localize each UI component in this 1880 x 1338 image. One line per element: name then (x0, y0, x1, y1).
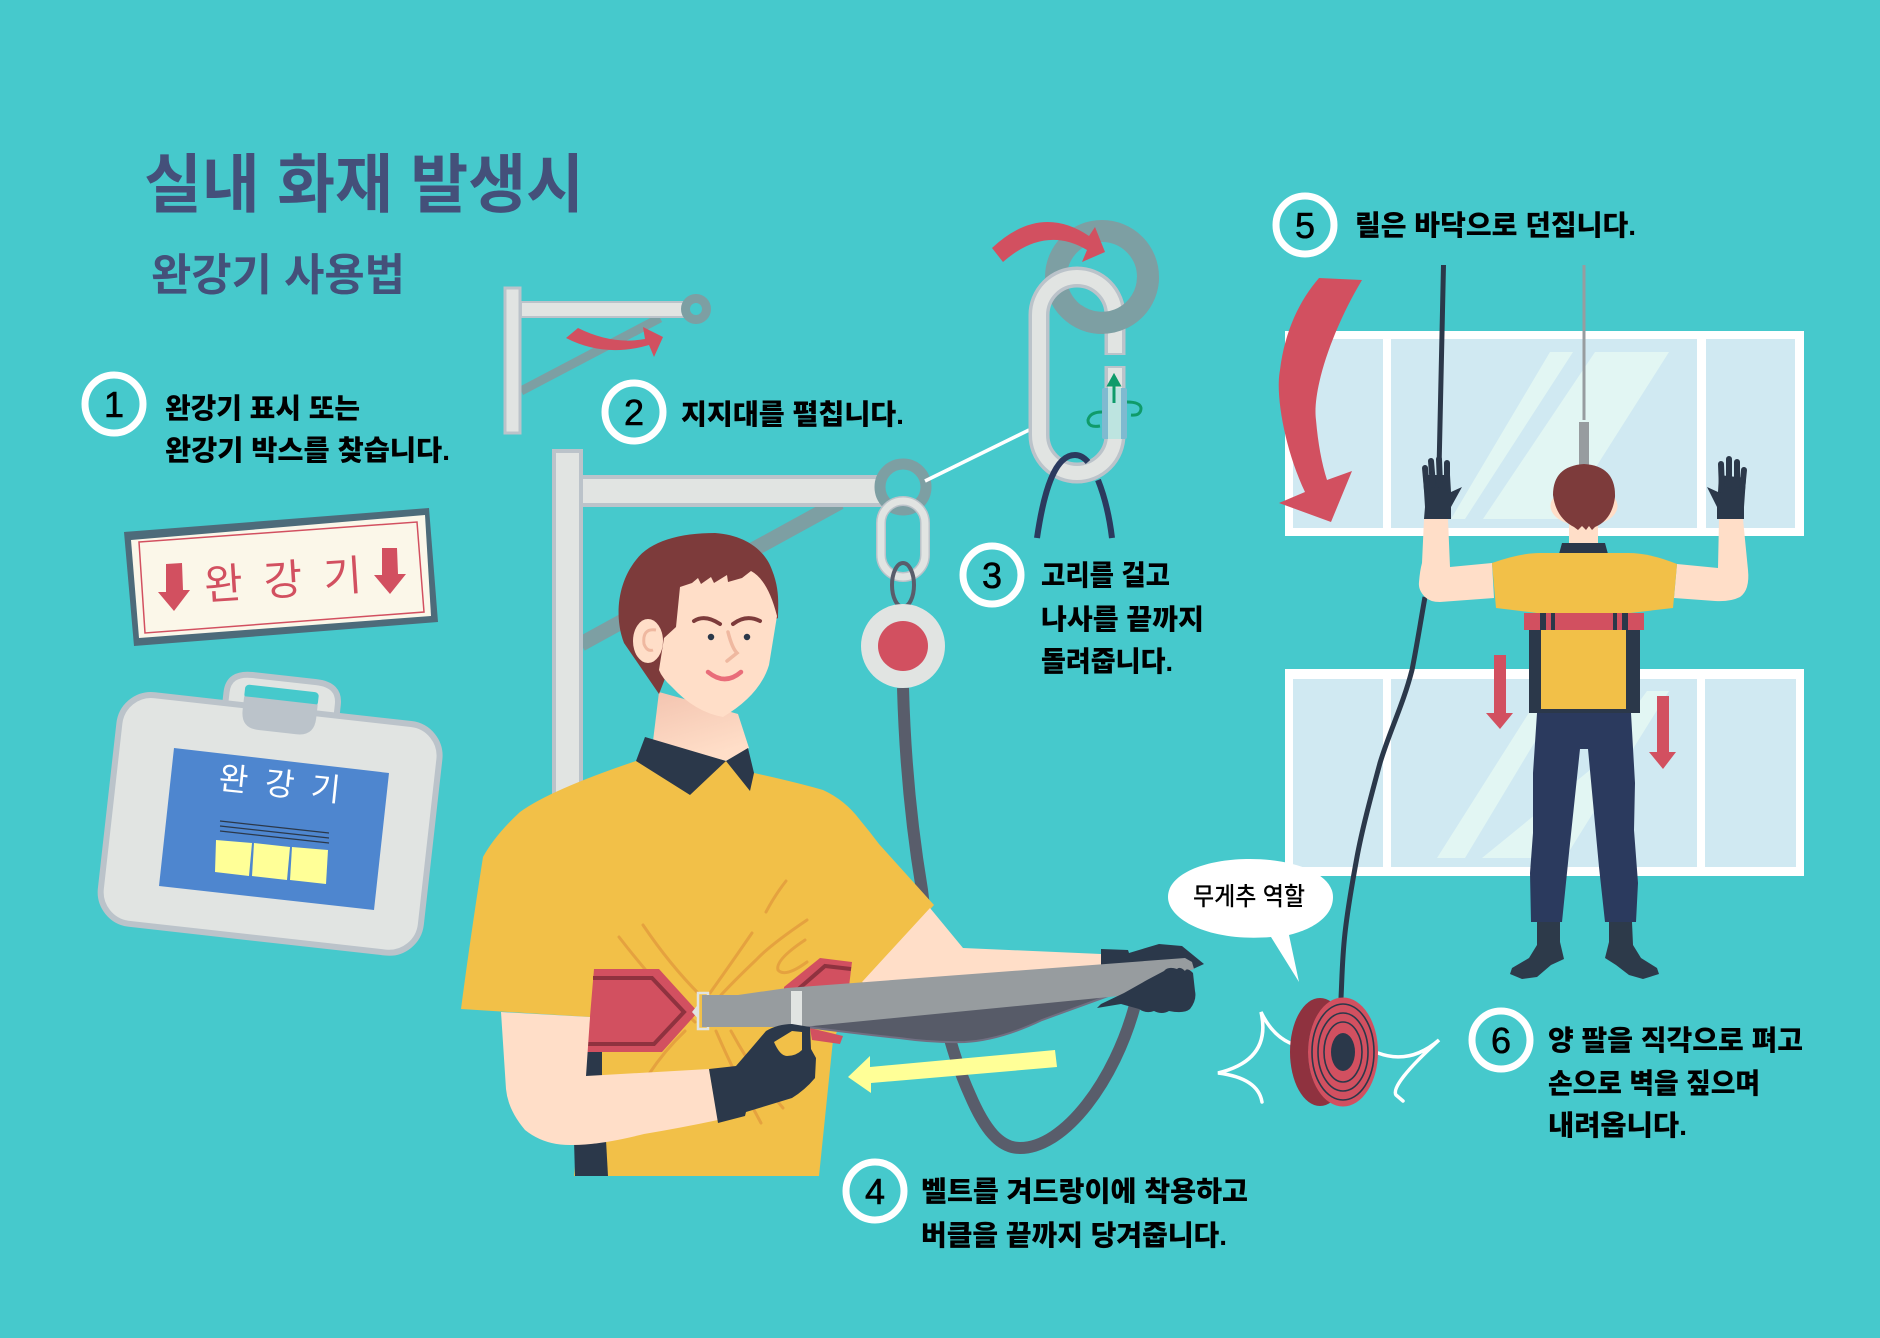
wangangi box: 완 강 기 (217, 760, 342, 808)
step 2 badge (605, 383, 663, 441)
carabiner detail (1037, 231, 1148, 538)
man wearing belt (461, 533, 1204, 1176)
belt strap (702, 958, 1194, 1027)
belt strap underside (807, 996, 1108, 1042)
arrow: unfold bracket (566, 327, 663, 357)
step 3 text: 돌려줍니다. (1041, 646, 1173, 677)
step 5 badge: 5 (1295, 205, 1315, 246)
arrow: descend right (1649, 696, 1676, 769)
collar (1559, 543, 1608, 554)
step 6 text: 손으로 벽을 짚으며 (1548, 1068, 1760, 1099)
belt loop (791, 991, 802, 1030)
step 3 badge (963, 546, 1021, 604)
reel rope (1341, 265, 1444, 998)
shoes (1510, 922, 1659, 979)
harness (1524, 613, 1644, 713)
step 4 badge: 4 (865, 1171, 885, 1212)
speech bubble (1168, 859, 1333, 982)
large support bracket (554, 451, 926, 796)
arms (1419, 519, 1494, 602)
arrow: throw reel down (1279, 278, 1362, 522)
step 6 badge (1472, 1011, 1530, 1069)
speech bubble: 무게추 역할 (1193, 883, 1305, 911)
step 6 text (1548, 1025, 1803, 1141)
carabiner and reel device (861, 501, 945, 688)
step 4 badge (846, 1162, 904, 1220)
collar (636, 737, 754, 795)
title: 실내 화재 발생시 (144, 149, 584, 221)
shirt (1492, 553, 1677, 613)
step 4 text: 벨트를 겨드랑이에 착용하고 (921, 1176, 1248, 1207)
step 1 text: 완강기 박스를 찾습니다. (165, 435, 450, 466)
sign: wangangi: 완 강 기 (203, 552, 363, 609)
right arm (862, 908, 1110, 992)
step 3 text: 나사를 끝까지 (1041, 604, 1204, 635)
upper window (1285, 331, 1804, 536)
step 1 badge (85, 375, 143, 433)
wangangi box (97, 661, 446, 956)
lower glove (1097, 968, 1195, 1013)
step 2 text: 지지대를 펼칩니다. (681, 399, 904, 430)
step 5 badge (1276, 196, 1334, 254)
arrow: descend left (1486, 655, 1513, 729)
step 6 text: 내려옵니다. (1548, 1110, 1687, 1141)
gloves (1423, 459, 1746, 519)
step 5 text: 릴은 바닥으로 던집니다. (1355, 210, 1636, 241)
ear (633, 619, 663, 663)
lower window (1285, 669, 1804, 876)
step 3 text: 고리를 걸고 (1041, 560, 1170, 591)
arrow: pull buckle (848, 1050, 1057, 1093)
step 2 badge: 2 (624, 392, 644, 433)
left arm (501, 1012, 718, 1145)
facial features (694, 618, 760, 679)
step 3 badge: 3 (982, 555, 1002, 596)
impact lines (1218, 1012, 1439, 1102)
connector line to detail (925, 430, 1029, 481)
step 6 badge: 6 (1491, 1020, 1511, 1061)
step 4 text: 버클을 끝까지 당겨줍니다. (921, 1220, 1227, 1251)
rear pad (784, 958, 852, 1044)
step 2 bracket illustration (505, 288, 706, 433)
subtitle: 완강기 사용법 (151, 251, 405, 300)
holding glove (709, 1024, 816, 1123)
back strap (574, 1050, 608, 1176)
step 6 text: 양 팔을 직각으로 펴고 (1548, 1025, 1803, 1056)
reel (1290, 998, 1378, 1106)
head (1550, 464, 1618, 546)
trousers (1530, 713, 1638, 922)
face (659, 571, 777, 717)
hair (619, 533, 778, 694)
shirt wrinkles (619, 881, 807, 1123)
buckle clip (692, 992, 708, 1030)
front pad (587, 969, 698, 1052)
support rope (1579, 265, 1589, 466)
lowering rope (903, 688, 1135, 1148)
sign: wangangi (124, 508, 438, 646)
person descending (1419, 459, 1748, 979)
yellow shirt (461, 761, 934, 1176)
step 1 text: 완강기 표시 또는 (165, 393, 360, 424)
neck (653, 692, 749, 761)
step 1 badge: 1 (104, 384, 124, 425)
step 4 text (921, 1176, 1248, 1251)
step 3 text (1041, 560, 1204, 677)
top glove (1101, 944, 1204, 969)
step 1 text (165, 393, 450, 466)
arrow: screw rotation (992, 222, 1105, 262)
